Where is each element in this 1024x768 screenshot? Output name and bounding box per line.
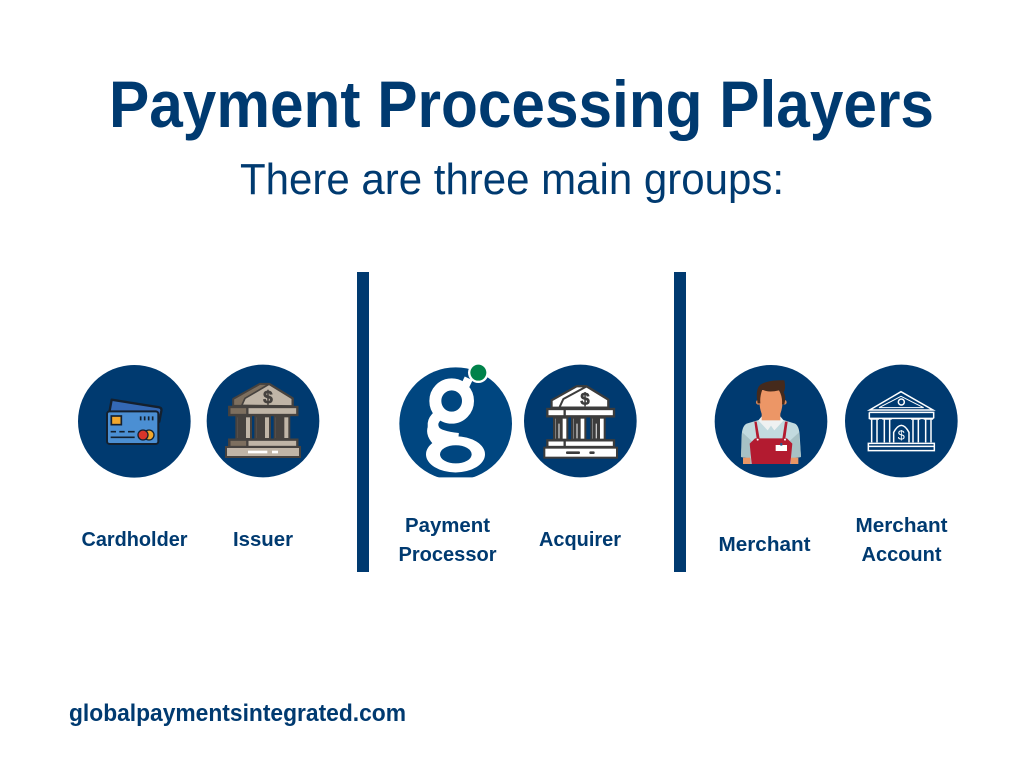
title: Payment Processing Players xyxy=(109,67,934,141)
icon: acquirer bank xyxy=(524,365,637,477)
divider: left xyxy=(357,272,369,572)
label: Payment Processor xyxy=(398,515,497,566)
label: Merchant Account: Account xyxy=(862,544,942,566)
label: Cardholder: Cardholder xyxy=(82,529,188,551)
label: Merchant: Merchant xyxy=(718,534,811,556)
icon: merchant account bank xyxy=(845,365,958,477)
divider: right xyxy=(674,272,686,572)
label: Issuer: Issuer xyxy=(233,529,293,551)
icon: merchant account bank: $ xyxy=(898,429,905,443)
subtitle: There are three main groups: xyxy=(240,155,784,204)
label: Merchant Account: Merchant xyxy=(856,515,948,537)
icon: issuer bank: $ xyxy=(263,387,273,407)
icon: cardholder credit cards xyxy=(78,365,191,478)
icon: payment processor logo xyxy=(399,362,512,480)
label: Payment Processor: Payment xyxy=(405,515,490,537)
label: Acquirer: Acquirer xyxy=(539,529,621,551)
label: Merchant Account xyxy=(856,515,948,566)
icon: merchant person xyxy=(715,365,827,478)
icon: issuer bank xyxy=(207,365,319,477)
label: Payment Processor: Processor xyxy=(398,544,497,566)
icon: acquirer bank: $ xyxy=(580,390,590,409)
footer url: globalpaymentsintegrated.com xyxy=(69,700,406,727)
